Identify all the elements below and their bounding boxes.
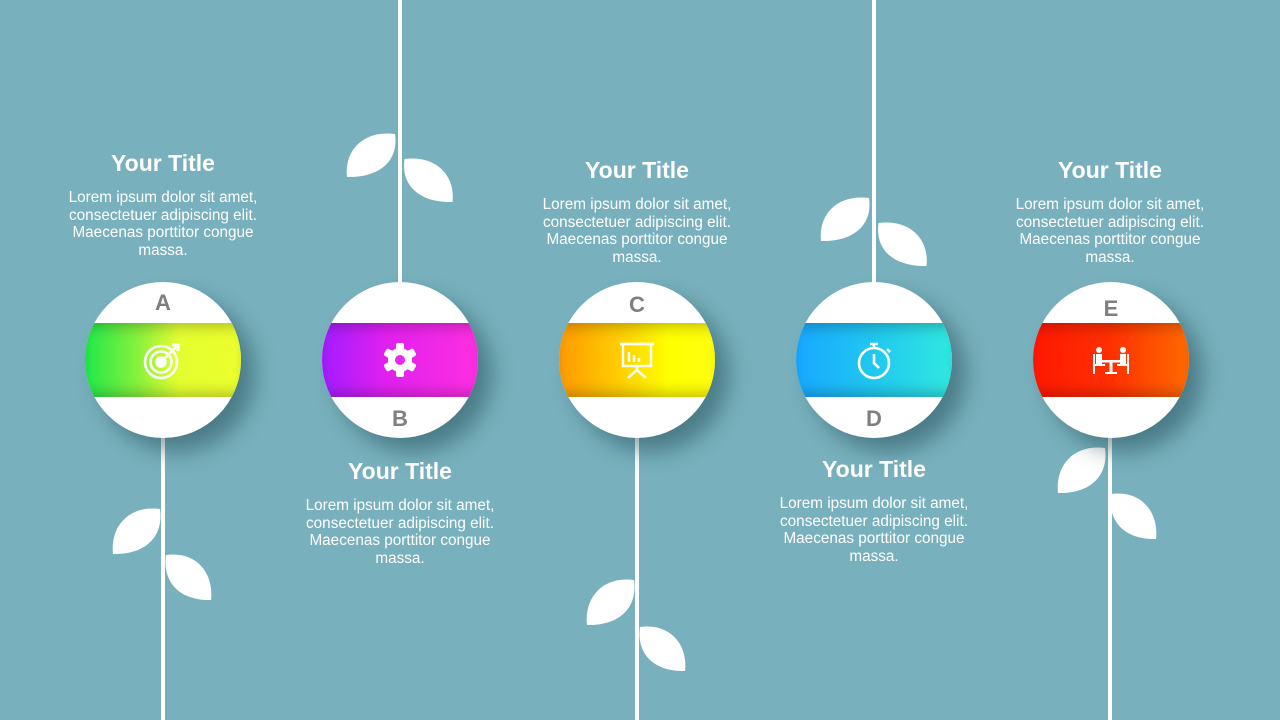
circle A [85, 282, 241, 438]
text block D: Your Title [822, 456, 926, 482]
leaf A right [166, 554, 212, 600]
text block E: Your Title [1058, 157, 1162, 183]
band E with meeting icon [1033, 323, 1189, 397]
text block D: Lorem ipsum dolor sit amet, consectetuer adipiscing elit. Maecenas porttitor congue massa. [780, 495, 968, 565]
circle E [1033, 282, 1189, 438]
text block E [1016, 157, 1204, 266]
text block D [780, 456, 968, 565]
letter A: A [155, 290, 171, 315]
leaf A left [112, 508, 160, 554]
text block B: Your Title [348, 458, 452, 484]
letter E: E [1104, 296, 1118, 321]
band B with gear icon [322, 323, 478, 397]
circle C [559, 282, 715, 438]
stem lines [161, 430, 165, 720]
letter B: B [392, 406, 408, 431]
band A with target icon [85, 323, 241, 397]
band C with presentation icon [559, 323, 715, 397]
text block A [69, 150, 257, 259]
text block C [543, 157, 731, 266]
leaf C left [586, 580, 634, 625]
leaf B right [404, 158, 453, 202]
text block E: Lorem ipsum dolor sit amet, consectetuer adipiscing elit. Maecenas porttitor congue massa. [1016, 196, 1204, 266]
leaf B left [346, 134, 396, 177]
text block B [306, 458, 494, 567]
leaf D left [820, 198, 870, 241]
leaf E left [1058, 448, 1106, 493]
text block C: Lorem ipsum dolor sit amet, consectetuer adipiscing elit. Maecenas porttitor congue massa. [543, 196, 731, 266]
leaf E right [1112, 494, 1156, 539]
text block C: Your Title [585, 157, 689, 183]
text block A: Your Title [111, 150, 215, 176]
leaf D right [878, 222, 927, 266]
circle B [322, 282, 478, 438]
circle D [796, 282, 952, 438]
text block B: Lorem ipsum dolor sit amet, consectetuer adipiscing elit. Maecenas porttitor congue massa. [306, 497, 494, 567]
leaf C right [640, 626, 686, 671]
letter D: D [866, 406, 882, 431]
letter C: C [629, 292, 645, 317]
text block A: Lorem ipsum dolor sit amet, consectetuer adipiscing elit. Maecenas porttitor congue massa. [69, 189, 257, 259]
band D with stopwatch icon [796, 323, 952, 397]
